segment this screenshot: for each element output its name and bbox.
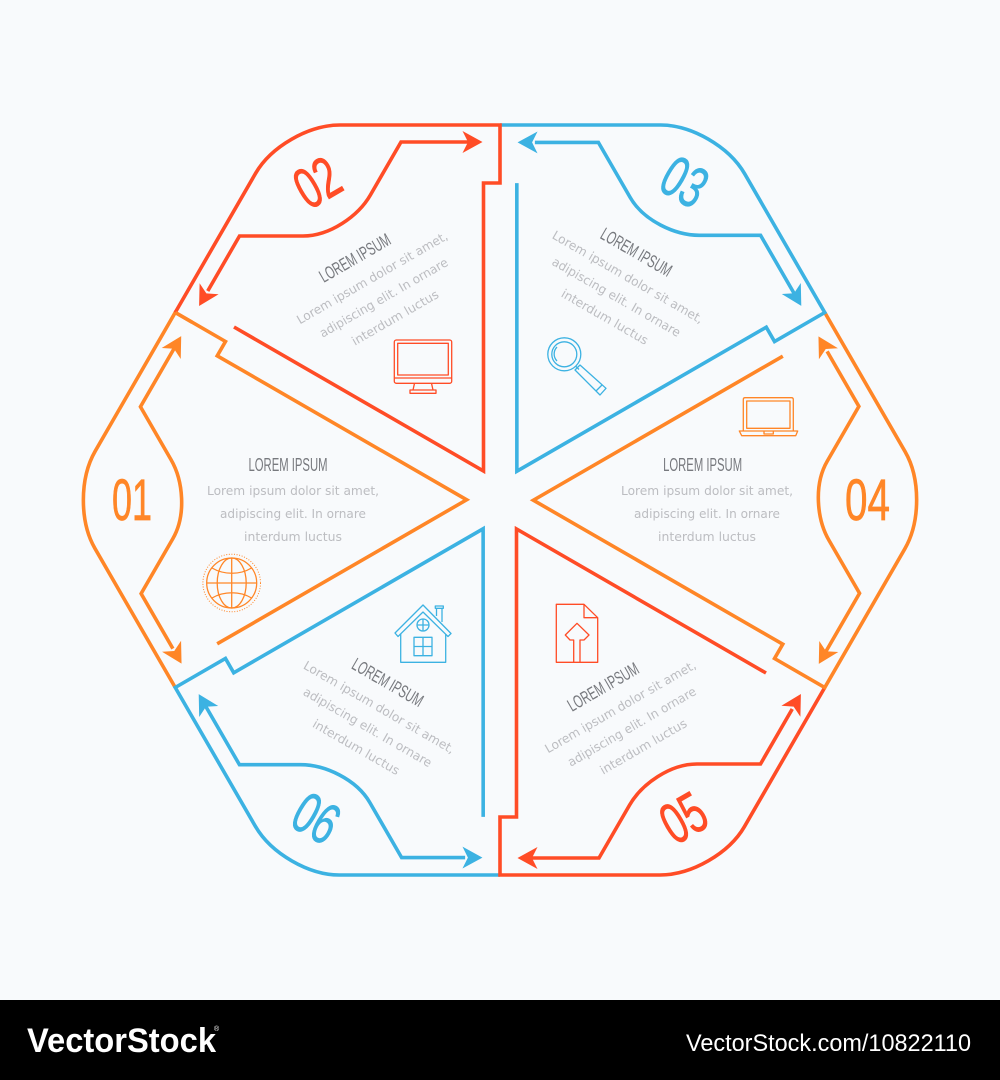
icon: house	[395, 605, 451, 662]
icon: file upload	[556, 604, 598, 662]
panel: step 01	[13, 312, 475, 767]
double arrow 04	[677, 336, 970, 669]
panel: step 04	[525, 233, 987, 688]
number 04: 04	[845, 468, 890, 533]
number 06: 06	[281, 780, 351, 857]
heading 04: LOREM IPSUM	[663, 455, 742, 475]
segment outline 02	[175, 125, 500, 471]
number 05: 05	[649, 779, 719, 857]
body 06: Lorem ipsum dolor sit amet,	[301, 658, 457, 757]
icon: laptop	[739, 398, 798, 436]
body 03: Lorem ipsum dolor sit amet,	[550, 227, 706, 326]
heading 01: LOREM IPSUM	[248, 455, 328, 475]
body 01	[207, 483, 379, 544]
double arrow 03	[518, 55, 811, 388]
watermark logo text: VectorStock	[27, 1022, 216, 1060]
heading 05: LOREM IPSUM	[564, 659, 642, 715]
segment outline 05	[500, 529, 825, 875]
body 06: adipiscing elit. In ornare	[301, 684, 435, 770]
body 03	[527, 227, 706, 366]
body 01: adipiscing elit. In ornare	[220, 506, 366, 521]
body 01: Lorem ipsum dolor sit amet,	[207, 483, 379, 498]
double arrow 06	[189, 612, 482, 945]
body 04: Lorem ipsum dolor sit amet,	[621, 483, 793, 498]
segment outline 04	[525, 233, 987, 688]
segment outline 01	[13, 312, 475, 767]
body 05: interdum luctus	[597, 715, 689, 777]
segment outline 03	[363, 31, 825, 485]
body 03: interdum luctus	[559, 286, 651, 348]
number 02: 02	[283, 144, 352, 222]
number 01: 01	[112, 468, 152, 533]
body 02	[294, 228, 473, 367]
body 06	[278, 658, 457, 796]
watermark url: VectorStock.com/10822110	[686, 1030, 971, 1057]
body 02: Lorem ipsum dolor sit amet,	[294, 228, 450, 327]
body 04: adipiscing elit. In ornare	[634, 506, 780, 521]
body 05	[542, 657, 721, 796]
text block 03	[527, 203, 720, 366]
icon: monitor	[394, 340, 452, 393]
text block 06	[278, 633, 471, 796]
body 06: interdum luctus	[310, 716, 402, 778]
panel: step 05	[500, 529, 825, 875]
text block 05	[528, 633, 721, 796]
number 03: 03	[649, 143, 719, 221]
text block 04	[621, 455, 793, 544]
icon: globe	[203, 554, 260, 612]
body 03: adipiscing elit. In ornare	[549, 254, 683, 340]
double arrow 02	[199, 131, 482, 306]
registered mark: ®	[214, 1025, 220, 1033]
panel: step 02	[175, 125, 500, 471]
body 02: interdum luctus	[349, 286, 441, 348]
body 05: adipiscing elit. In ornare	[565, 684, 699, 770]
heading 06: LOREM IPSUM	[348, 654, 427, 711]
body 02: adipiscing elit. In ornare	[317, 255, 451, 341]
panel: step 06	[175, 514, 637, 969]
body 04: interdum luctus	[658, 529, 756, 544]
double arrow 05	[518, 694, 801, 869]
double arrow 01	[30, 331, 323, 664]
heading 02: LOREM IPSUM	[316, 230, 394, 286]
icon: magnifier	[548, 338, 606, 395]
text block 02	[280, 204, 473, 367]
text block 01	[207, 455, 379, 544]
footer bar	[0, 1000, 1000, 1080]
heading 03: LOREM IPSUM	[597, 224, 676, 281]
panel: step 03	[363, 31, 825, 485]
body 04	[621, 483, 793, 544]
segment outline 06	[175, 514, 637, 969]
body 01: interdum luctus	[244, 529, 342, 544]
body 05: Lorem ipsum dolor sit amet,	[542, 657, 698, 756]
